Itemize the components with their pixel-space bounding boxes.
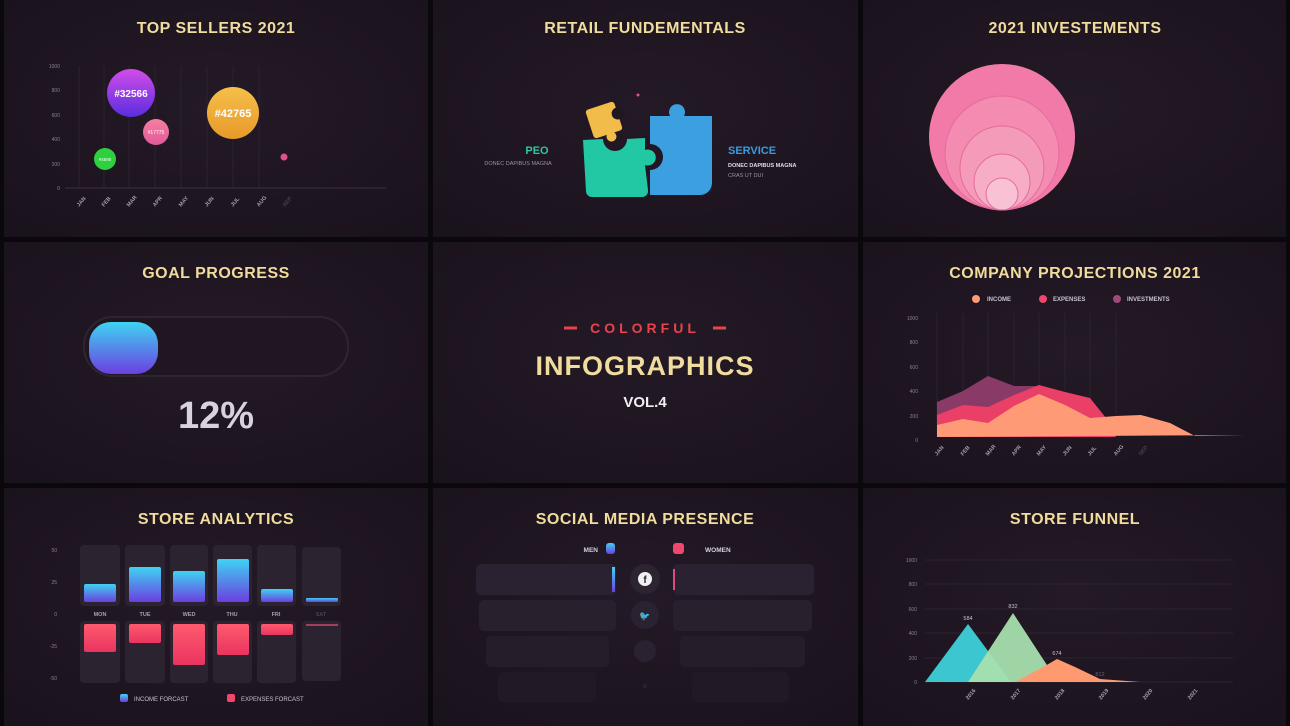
icon: third — [634, 640, 656, 662]
funnel chart: 2020 — [1142, 688, 1154, 701]
area chart — [907, 313, 1245, 457]
legend: INCOME FORCAST — [134, 697, 189, 703]
bar chart: SAT — [316, 612, 327, 618]
bar chart: MON — [94, 612, 106, 618]
bubble chart: 200 — [52, 162, 60, 168]
area chart: JAN — [934, 445, 946, 457]
area chart: AUG — [1113, 444, 1125, 457]
title: top sellers: TOP SELLERS 2021 — [137, 20, 295, 37]
panel: store analytics — [50, 511, 341, 703]
rows — [476, 564, 814, 702]
legend: WOMEN — [705, 547, 731, 554]
subtitle: colorful: COLORFUL — [590, 320, 700, 336]
funnel chart — [906, 558, 1233, 701]
title: goal: GOAL PROGRESS — [142, 265, 290, 282]
bubble chart: AUG — [256, 195, 268, 208]
area chart: 600 — [910, 365, 918, 371]
vol: VOL.4 — [623, 394, 667, 411]
funnel chart: 800 — [909, 582, 917, 588]
icon: fourth — [643, 684, 647, 688]
panel: top sellers — [49, 20, 386, 208]
funnel chart: 584 — [963, 616, 973, 622]
icon: facebook — [630, 564, 660, 594]
icon: puzzle — [583, 94, 712, 197]
text: PEO: DONEC DAPIBUS MAGNA — [484, 161, 552, 167]
funnel chart: 812 — [1095, 672, 1105, 678]
funnel chart: 2016 — [965, 688, 977, 701]
legend — [120, 694, 304, 703]
funnel chart: 1000 — [906, 558, 917, 564]
percent: 12% — [178, 395, 254, 437]
title: social: SOCIAL MEDIA PRESENCE — [536, 511, 754, 528]
bar chart: WED — [183, 612, 195, 618]
panel: center title — [535, 320, 755, 411]
bubble chart: #32566 — [114, 89, 148, 100]
bubble chart: MAY — [178, 195, 190, 208]
bar chart: -50 — [50, 676, 57, 682]
funnel chart: 2017 — [1010, 688, 1022, 701]
funnel chart: 0 — [914, 680, 917, 686]
panel: investments — [929, 20, 1162, 210]
funnel chart: 2019 — [1098, 688, 1110, 701]
text: service: SERVICE — [728, 145, 776, 157]
text: service — [728, 145, 796, 179]
bubble chart: 800 — [52, 88, 60, 94]
bar chart: 25 — [51, 580, 57, 586]
area chart: 1000 — [907, 316, 918, 322]
bar chart: FRI — [272, 612, 281, 618]
title: retail: RETAIL FUNDEMENTALS — [544, 20, 746, 37]
text: service: DONEC DAPIBUS MAGNA — [728, 163, 796, 169]
panel: retail fundamentals — [484, 20, 796, 197]
legend: MEN — [584, 547, 598, 554]
bar chart: 0 — [54, 612, 57, 618]
icon: facebook: f — [643, 575, 647, 586]
area chart: MAY — [1036, 444, 1048, 457]
bubble chart: JUL — [230, 196, 242, 208]
bar chart: -25 — [50, 644, 57, 650]
panel: company projections — [907, 265, 1245, 457]
title: store analytics: STORE ANALYTICS — [138, 511, 294, 528]
panel: store funnel — [906, 511, 1233, 701]
area chart: 200 — [910, 414, 918, 420]
legend: EXPENSES FORCAST — [241, 697, 304, 703]
funnel chart: 2021 — [1187, 688, 1199, 701]
panel: social media — [476, 511, 814, 702]
bubble chart: #4590 — [99, 157, 112, 162]
bubble chart: FEB — [101, 196, 113, 208]
funnel chart: 400 — [909, 631, 917, 637]
concentric circles — [929, 64, 1075, 210]
icon: twitter: 🐦 — [639, 611, 651, 621]
bubble chart: 400 — [52, 137, 60, 143]
legend: INCOME — [987, 297, 1011, 303]
progress bar — [84, 317, 348, 376]
area chart: FEB — [960, 445, 972, 457]
bubble chart: JAN — [76, 196, 88, 208]
funnel chart: 674 — [1052, 651, 1062, 657]
bubble chart: APR — [152, 196, 164, 208]
funnel chart: 2018 — [1054, 688, 1066, 701]
legend — [584, 543, 731, 554]
title: infographics: INFOGRAPHICS — [535, 351, 755, 381]
title: projections: COMPANY PROJECTIONS 2021 — [949, 265, 1201, 282]
area chart: 800 — [910, 340, 918, 346]
bubble chart: SEP — [282, 196, 294, 208]
legend — [972, 295, 1170, 303]
funnel chart: 200 — [909, 656, 917, 662]
legend: EXPENSES — [1053, 297, 1085, 303]
area chart: APR — [1011, 445, 1023, 457]
bubble chart: MAR — [126, 195, 139, 208]
area chart: SEP — [1138, 445, 1150, 457]
text: service: CRAS UT DUI — [728, 173, 764, 179]
panel: goal progress — [84, 265, 348, 437]
text: PEO: PEO — [525, 145, 549, 157]
title: investments: 2021 INVESTEMENTS — [988, 20, 1162, 37]
bubble chart: 1000 — [49, 64, 60, 70]
text: PEO — [484, 145, 552, 167]
title: funnel: STORE FUNNEL — [1010, 511, 1140, 528]
bubble chart — [49, 64, 386, 208]
bubble chart: JUN — [204, 196, 216, 208]
bar chart: TUE — [140, 612, 151, 618]
area chart: 400 — [910, 389, 918, 395]
bubble chart: #42765 — [215, 108, 251, 120]
bubble chart: 600 — [52, 113, 60, 119]
bar chart: THU — [226, 612, 238, 618]
bubble chart: #17775 — [148, 130, 165, 136]
bubble chart: 0 — [57, 186, 60, 192]
bar chart: 50 — [51, 548, 57, 554]
icon: twitter — [631, 601, 659, 629]
area chart: MAR — [985, 444, 998, 457]
funnel chart: 832 — [1008, 604, 1018, 610]
area chart: 0 — [915, 438, 918, 444]
funnel chart: 600 — [909, 607, 917, 613]
area chart: JUL — [1087, 445, 1099, 457]
area chart: JUN — [1062, 445, 1074, 457]
bar chart — [50, 545, 341, 683]
legend: INVESTMENTS — [1127, 297, 1170, 303]
